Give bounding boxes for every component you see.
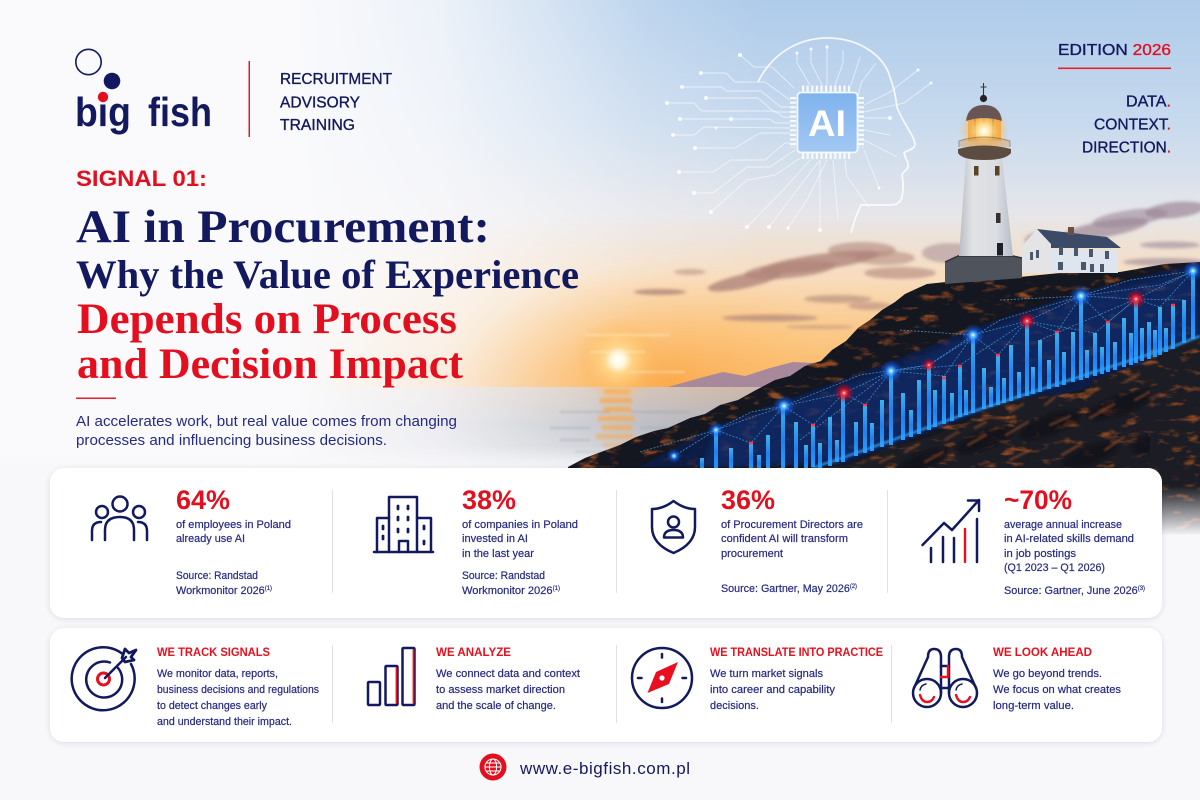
title bbox=[76, 201, 579, 388]
chip pins bbox=[793, 88, 861, 156]
title: Depends on Process bbox=[77, 296, 457, 343]
stat: ~70% skills demand bbox=[922, 485, 1145, 597]
activity: we look ahead: We focus on what creates bbox=[993, 684, 1121, 696]
activity: we track signals: We monitor data, reports, bbox=[157, 668, 278, 680]
circuit nodes bbox=[665, 45, 932, 232]
icon: binoculars bbox=[913, 649, 977, 707]
activity: we analyze: to assess market direction bbox=[436, 684, 565, 696]
lighthouse bbox=[945, 83, 1022, 284]
stat: ~70% skills demand: Source: Gartner, June 2026 bbox=[1004, 585, 1139, 597]
logo: big bbox=[75, 89, 131, 135]
title: Why the Value of Experience bbox=[76, 252, 579, 297]
sun bbox=[576, 318, 660, 402]
stat: 36% procurement directors bbox=[652, 485, 863, 595]
icon: target with arrow bbox=[72, 647, 136, 710]
stat: 38% companies: in the last year bbox=[462, 548, 534, 560]
services list: ADVISORY bbox=[280, 94, 360, 112]
footer website: www.e-bigfish.com.pl bbox=[519, 759, 690, 778]
activity: we look ahead: long-term value. bbox=[993, 700, 1074, 712]
activity: we track signals: to detect changes early bbox=[157, 700, 267, 712]
logo bbox=[75, 49, 212, 135]
activity: we look ahead: WE LOOK AHEAD bbox=[993, 647, 1092, 659]
icon: bar chart bbox=[368, 648, 414, 705]
stone base bbox=[945, 256, 1022, 284]
small red bar tips bbox=[749, 305, 1175, 443]
stat: 38% companies: 38% bbox=[462, 485, 516, 515]
activity: we analyze: WE ANALYZE bbox=[436, 647, 511, 659]
logo: fish bbox=[148, 89, 212, 135]
tagline: DIRECTION. bbox=[1082, 140, 1171, 156]
subtitle: processes and influencing business decisions. bbox=[76, 432, 387, 449]
stat: 38% companies bbox=[374, 485, 578, 597]
chip bbox=[798, 92, 858, 152]
title: AI in Procurement: bbox=[76, 201, 490, 253]
stat: 64% employees: Source: Randstad bbox=[176, 570, 258, 582]
icon: compass bbox=[632, 648, 692, 708]
services list: TRAINING bbox=[280, 117, 355, 134]
tagline: DATA. bbox=[1126, 94, 1171, 110]
activity: we translate into practice: We turn market signals bbox=[710, 668, 823, 680]
keeper's house bbox=[1019, 227, 1121, 273]
activity: we translate into practice: decisions. bbox=[710, 700, 759, 712]
activity: we track signals: and understand their impact. bbox=[157, 716, 292, 728]
stat: 64% employees: 64% bbox=[176, 485, 230, 515]
AI head illustration: AI bbox=[808, 103, 846, 144]
mountains bbox=[668, 362, 815, 387]
glowing data chart on rocks bbox=[640, 261, 1200, 470]
panel: activities bbox=[50, 628, 1162, 742]
icon: people bbox=[92, 496, 147, 540]
signal label: SIGNAL 01: bbox=[76, 166, 207, 191]
services list: RECRUITMENT bbox=[280, 71, 393, 88]
activity: we look ahead: We go beyond trends. bbox=[993, 668, 1102, 680]
activity: we track signals bbox=[72, 647, 319, 728]
network lines bbox=[640, 271, 1193, 456]
AI head illustration bbox=[665, 38, 932, 233]
blue dusk band behind chart bbox=[640, 262, 1200, 467]
sun reflection bbox=[596, 389, 634, 447]
activity: we look ahead bbox=[913, 647, 1121, 712]
stat: ~70% skills demand: (3) bbox=[1138, 586, 1145, 592]
stat: 64% employees: Workmonitor 2026 bbox=[176, 585, 266, 597]
subtitle: AI accelerates work, but real value comes from changing bbox=[76, 413, 457, 430]
stat: 38% companies: Source: Randstad bbox=[462, 570, 545, 582]
services list bbox=[280, 71, 393, 134]
title accent rule bbox=[76, 398, 116, 399]
subtitle bbox=[76, 413, 457, 449]
activity: we translate into practice bbox=[632, 647, 883, 712]
lantern bbox=[968, 116, 1001, 141]
icon: office buildings bbox=[374, 497, 433, 552]
clouds bbox=[634, 199, 1200, 329]
stat: 38% companies: Workmonitor 2026 bbox=[462, 585, 552, 597]
icon: globe bbox=[480, 754, 506, 780]
activity: we track signals: WE TRACK SIGNALS bbox=[157, 647, 270, 659]
stat: 36% procurement directors: of Procurement Directors are bbox=[721, 519, 863, 531]
stat: 64% employees: (1) bbox=[265, 586, 272, 592]
stat: 64% employees: already use AI bbox=[176, 533, 245, 545]
stat: ~70% skills demand: in AI-related skills demand bbox=[1004, 533, 1134, 545]
head outline bbox=[758, 38, 915, 233]
dome bbox=[966, 105, 1002, 121]
activity: we translate into practice: into career and capability bbox=[710, 684, 836, 696]
stat: 36% procurement directors: Source: Gartner, May 2026 bbox=[721, 583, 853, 595]
circuit traces bbox=[667, 47, 931, 230]
stat: ~70% skills demand: in job postings bbox=[1004, 548, 1077, 560]
stat: 36% procurement directors: confident AI will transform bbox=[721, 533, 848, 545]
tagline bbox=[1082, 94, 1171, 156]
activity: we translate into practice: WE TRANSLATE INTO PRACTICE bbox=[710, 647, 883, 659]
stat: 38% companies: of companies in Poland bbox=[462, 519, 578, 531]
edition badge bbox=[1058, 42, 1171, 69]
bar base line bbox=[812, 336, 1200, 468]
bar glow bbox=[700, 271, 1200, 470]
gallery bbox=[959, 137, 1010, 147]
stat: ~70% skills demand: (Q1 2023 – Q1 2026) bbox=[1004, 562, 1105, 574]
logo divider bbox=[248, 61, 250, 137]
rock lumps bbox=[902, 384, 1150, 468]
tower bbox=[959, 158, 1013, 256]
stat: 64% employees bbox=[92, 485, 291, 597]
tagline: CONTEXT. bbox=[1094, 116, 1171, 134]
icon: shield with person bbox=[652, 501, 695, 553]
rust streaks bbox=[878, 372, 1150, 464]
lower foreground rock bbox=[877, 359, 1150, 468]
activity: we track signals: business decisions and regulations bbox=[157, 684, 319, 696]
stat: 36% procurement directors: 36% bbox=[721, 485, 775, 515]
footer website bbox=[480, 754, 690, 780]
background: sky and sea scene bbox=[334, 0, 1200, 468]
stat: ~70% skills demand: ~70% bbox=[1004, 485, 1072, 515]
stat: 36% procurement directors: (2) bbox=[850, 584, 857, 590]
activity: we analyze: We connect data and context bbox=[436, 668, 580, 680]
glow nodes red bbox=[834, 383, 854, 403]
glow nodes blue bbox=[668, 450, 680, 462]
activity: we analyze bbox=[368, 647, 580, 712]
icon: growth chart bbox=[922, 500, 979, 562]
stat: 64% employees: of employees in Poland bbox=[176, 519, 291, 531]
bars bbox=[700, 271, 1195, 470]
stat: 36% procurement directors: procurement bbox=[721, 548, 783, 560]
panel: statistics bbox=[50, 468, 1162, 618]
stat: ~70% skills demand: average annual increase bbox=[1004, 519, 1122, 531]
stat: 38% companies: invested in AI bbox=[462, 533, 528, 545]
right rock strip continuation bbox=[1150, 336, 1200, 615]
rocky headland bbox=[568, 262, 1200, 468]
activity: we analyze: and the scale of change. bbox=[436, 700, 556, 712]
title: and Decision Impact bbox=[77, 341, 464, 388]
stat: 38% companies: (1) bbox=[553, 586, 560, 592]
edition badge: EDITION 2026 bbox=[1058, 42, 1171, 59]
